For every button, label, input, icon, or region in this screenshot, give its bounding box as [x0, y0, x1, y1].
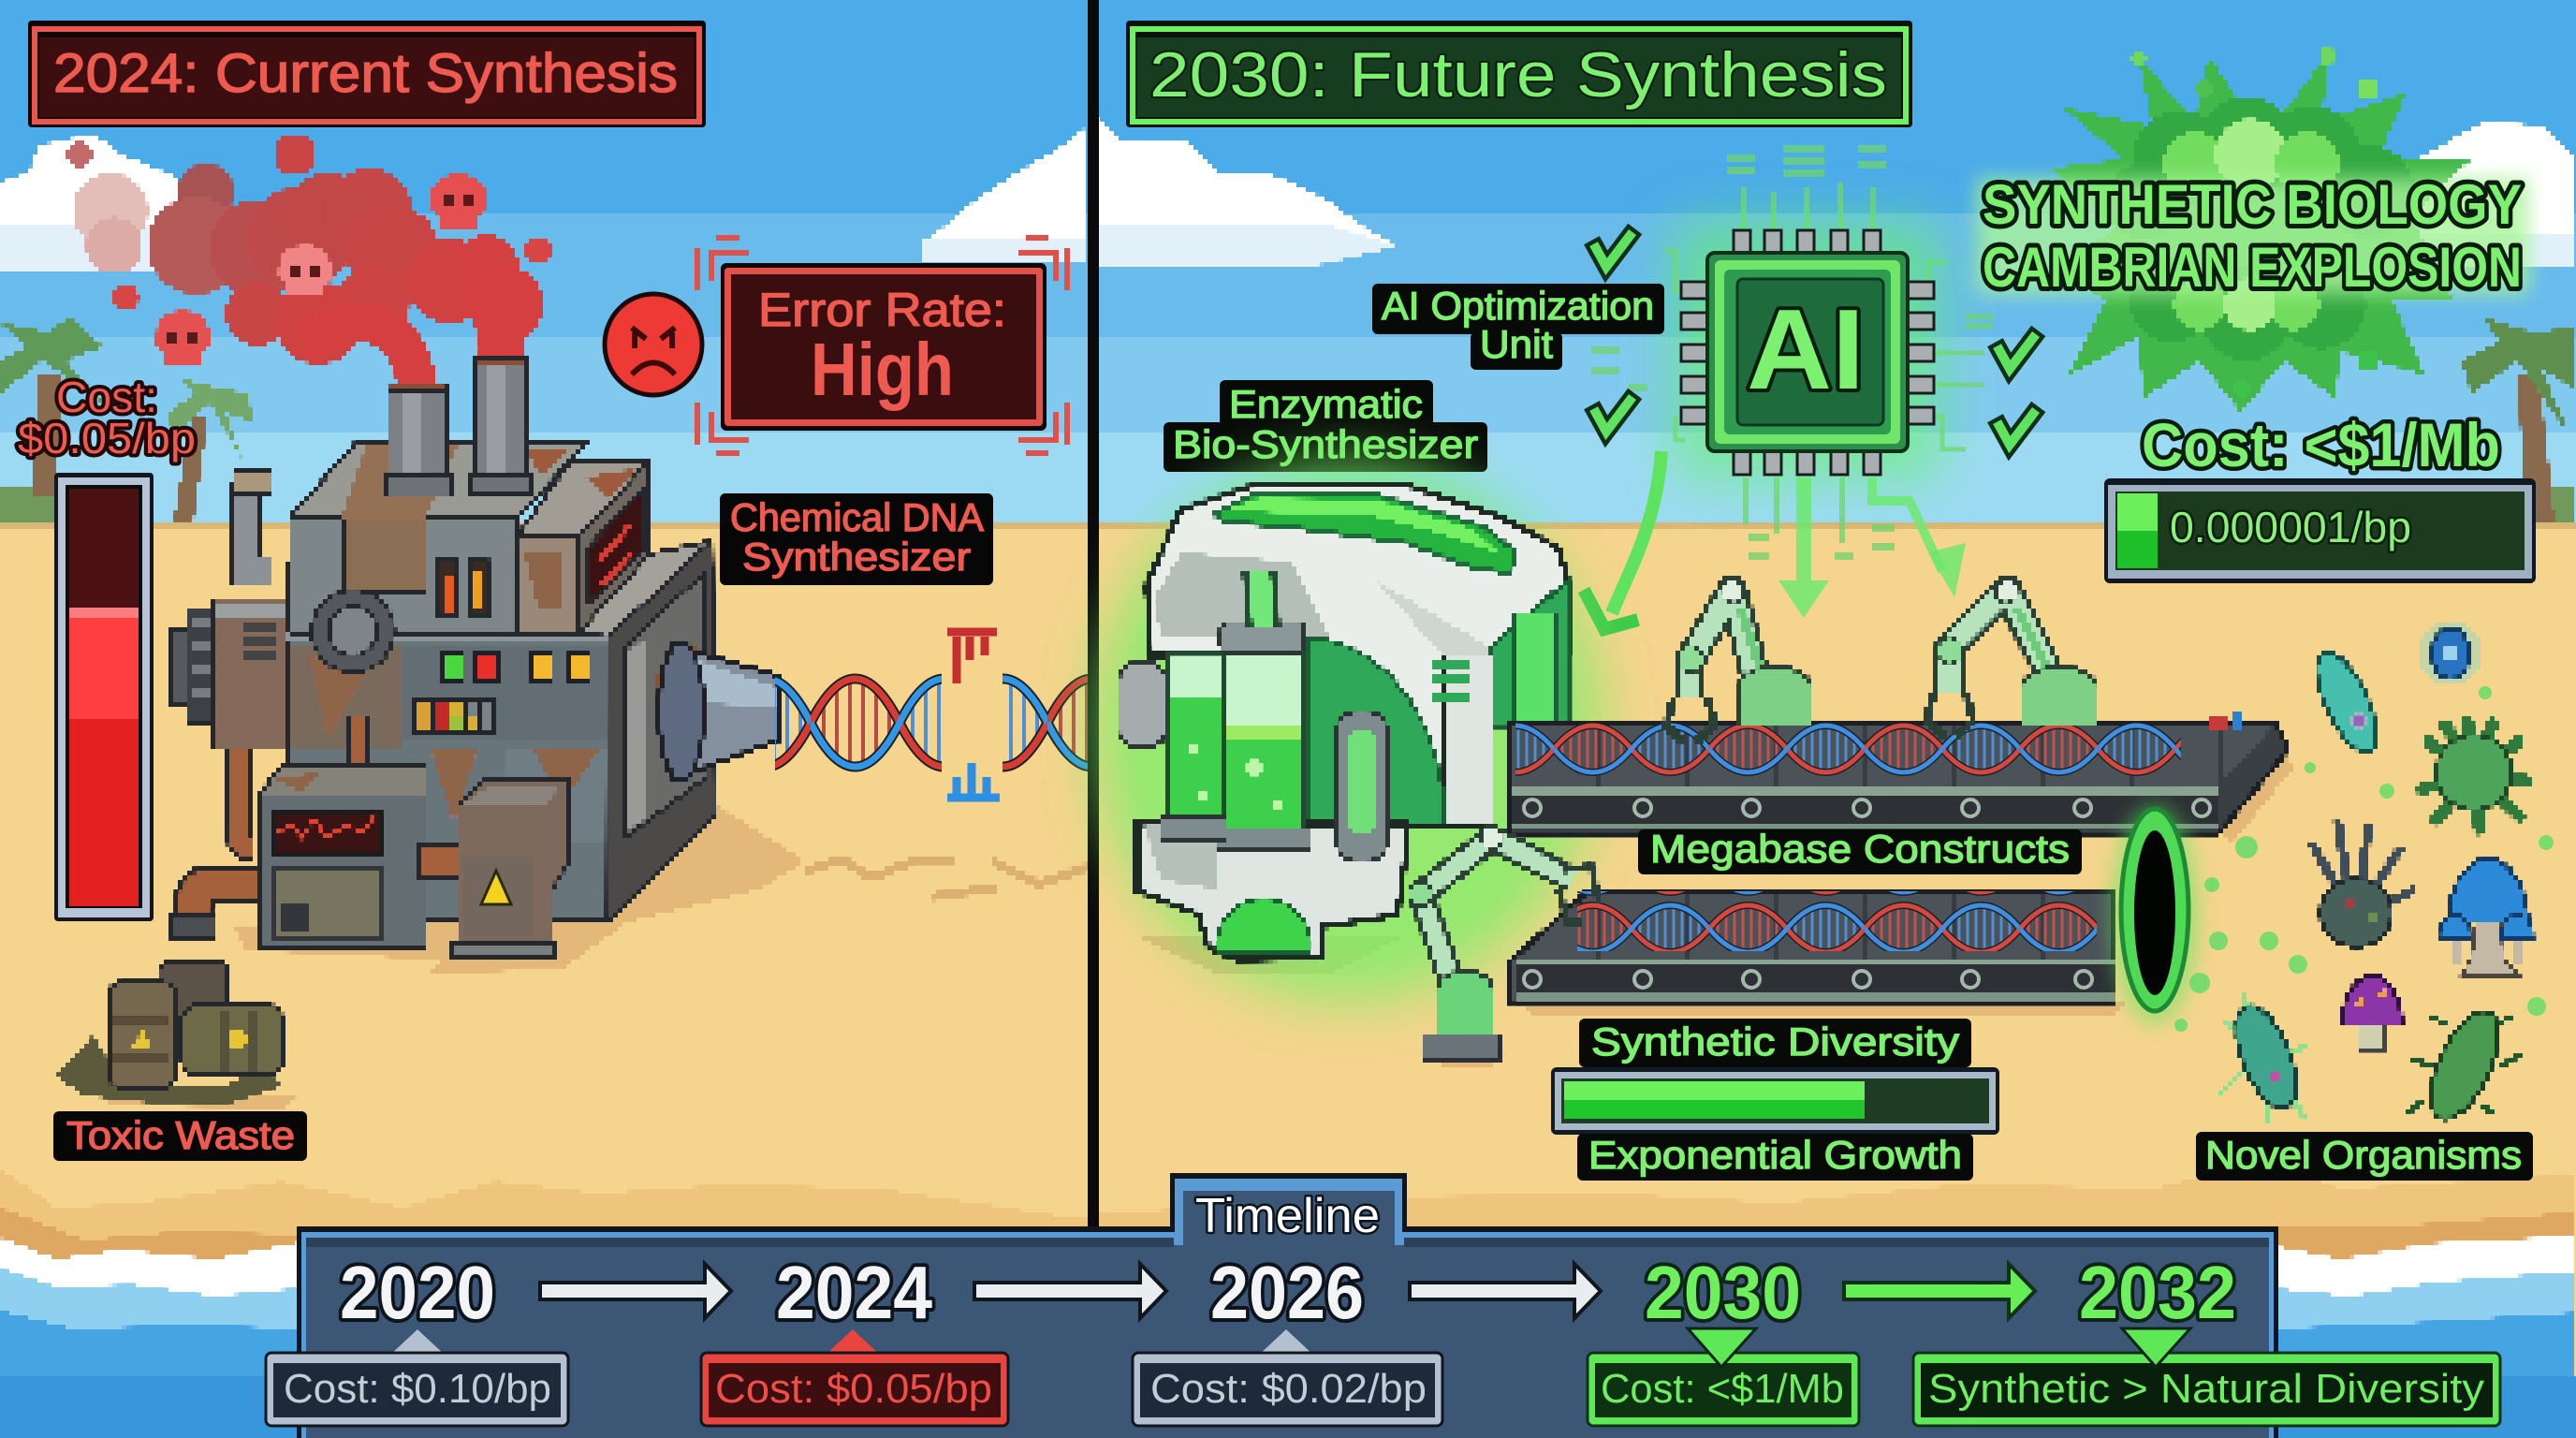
- callout: error rate: [721, 263, 1046, 431]
- foam: [0, 1236, 2576, 1438]
- callout: synthetic biology cambrian explosion: SYNTHETIC BIOLOGY: [1983, 173, 2522, 236]
- title: 2024 current synthesis: 2024: Current Synthesis: [53, 43, 678, 104]
- conveyor belt upper: [1511, 710, 2289, 833]
- label: synthetic diversity: Synthetic Diversity: [1591, 1020, 1959, 1064]
- organism: blue virus: [2419, 622, 2482, 685]
- organism: coral creature: [2312, 819, 2415, 946]
- label: megabase constructs: Megabase Constructs: [1650, 827, 2070, 871]
- panel: left 2024 current synthesis: [18, 21, 1088, 1161]
- cost label: [18, 373, 196, 462]
- cost box 2024: Cost: $0.05/bp: [715, 1366, 992, 1412]
- year 2032: 2032: [2079, 1251, 2236, 1334]
- label: exponential growth: Exponential Growth: [1588, 1133, 1962, 1177]
- right side: [607, 541, 716, 921]
- year 2026: 2026: [1210, 1251, 1364, 1334]
- nozzle: [659, 642, 779, 781]
- dome shell: [1147, 485, 1568, 826]
- icon: skull middle: [279, 245, 331, 294]
- label: toxic waste: Toxic Waste: [66, 1113, 295, 1157]
- label: enzymatic bio-synthesizer: [1164, 380, 1487, 472]
- lever: [348, 716, 371, 777]
- AI optimization arrows and data: [1584, 145, 1994, 629]
- arrow: [540, 1264, 731, 1318]
- year 2030: 2030: [1645, 1251, 1801, 1334]
- label: AI optimization unit: AI Optimization: [1382, 284, 1654, 328]
- water: [0, 1269, 2576, 1438]
- cost bar: future: [2104, 478, 2536, 583]
- tube top pipe: [1221, 623, 1305, 653]
- door: [1492, 580, 1568, 726]
- year 2020: 2020: [340, 1251, 495, 1334]
- explosion burst: [2050, 48, 2471, 412]
- icon: sad face: [605, 294, 702, 395]
- cost box 2032: [1913, 1328, 2500, 1426]
- label: novel organisms: Novel Organisms: [2205, 1133, 2522, 1177]
- cost box 2030: [1588, 1328, 1859, 1426]
- toxic smoke cloud: [66, 134, 551, 389]
- side arch: [1308, 638, 1444, 824]
- DNA strand breaking: [775, 632, 1088, 798]
- belt rollers: [1524, 971, 2092, 988]
- arrow: [974, 1264, 1166, 1318]
- main lower body: [286, 562, 608, 921]
- arrow green: [1844, 1264, 2035, 1318]
- cost label: $0.05/bp: [18, 414, 196, 462]
- timeline frame: [297, 1173, 2278, 1438]
- palm trees: [0, 318, 2576, 528]
- icon: error bracket marks: [697, 238, 1067, 453]
- title: 2024 current synthesis: [28, 21, 706, 127]
- cost label: future: Cost: <$1/Mb: [2142, 410, 2500, 479]
- panel lights: [441, 650, 465, 685]
- cost gauge bar: [54, 473, 154, 921]
- belt rollers: [1524, 800, 2210, 816]
- organism: green bacterium: [2218, 992, 2308, 1123]
- label: enzymatic bio-synthesizer: Bio-Synthesizer: [1173, 422, 1478, 466]
- chip pins: [1681, 230, 1934, 475]
- callout: error rate: High: [811, 328, 954, 411]
- connector pipe: [417, 844, 464, 876]
- title: 2030 future synthesis: 2030: Future Synthesis: [1149, 39, 1887, 110]
- icon: skull top: [431, 174, 487, 227]
- shore bands: [0, 1161, 2576, 1438]
- fragment: blue: [947, 763, 1000, 798]
- panel: right 2030 future synthesis: [1095, 21, 2554, 1181]
- spore dots: [2174, 686, 2554, 1032]
- icon: AI chip: AI: [1747, 286, 1865, 413]
- pipes: [245, 482, 271, 571]
- conveyor belt lower: [1511, 892, 2117, 1002]
- arrow: [1410, 1264, 1601, 1318]
- machine: enzymatic bio-synthesizer: [1095, 459, 1601, 1002]
- cost box 2032: Synthetic > Natural Diversity: [1928, 1366, 2484, 1412]
- cost box 2024: [701, 1329, 1008, 1426]
- icon: skull lower: [156, 311, 210, 363]
- title: 2030 future synthesis: [1126, 21, 1912, 127]
- label: enzymatic bio-synthesizer: Enzymatic: [1229, 382, 1423, 426]
- bubbles: [1247, 760, 1262, 775]
- DNA megabase upper: [1515, 722, 2181, 782]
- cost box 2026: Cost: $0.02/bp: [1150, 1366, 1427, 1412]
- sand: [0, 526, 2576, 1438]
- novel organisms group: [2174, 622, 2554, 1129]
- icon: hazard triangle: [481, 871, 511, 904]
- small tube: [1336, 712, 1388, 861]
- side module: [213, 599, 288, 749]
- icon: AI chip: [1676, 225, 1938, 477]
- hazard box: [459, 779, 569, 946]
- side column: [1444, 655, 1493, 826]
- organism: purple mushroom: [2342, 976, 2402, 1049]
- organism: dark green bacterium: [2406, 1002, 2523, 1129]
- cost box 2020: [266, 1329, 568, 1426]
- sand shadows: [94, 758, 2293, 1109]
- panel: timeline: [266, 1173, 2500, 1438]
- cost box 2026: [1133, 1329, 1442, 1426]
- robot arm three: [1409, 827, 1599, 1059]
- glossy green panel: [1213, 493, 1515, 573]
- year 2024: 2024: [776, 1251, 932, 1334]
- progress bar: synthetic diversity: [1551, 1067, 1999, 1135]
- left gear: [171, 629, 199, 704]
- portal: [2110, 804, 2200, 1025]
- timeline heading: Timeline: [1195, 1189, 1380, 1243]
- DNA megabase lower: [1577, 891, 2097, 951]
- upper body: [290, 518, 517, 633]
- robot arm one: [1666, 580, 1811, 741]
- label: chemical DNA synthesizer: [720, 493, 993, 585]
- callout: error rate: Error Rate:: [758, 284, 1006, 336]
- label: AI optimization unit: Unit: [1480, 322, 1553, 366]
- robot arm two: [1926, 580, 2097, 737]
- wheel: [312, 590, 394, 672]
- cost box 2020: Cost: $0.10/bp: [284, 1366, 551, 1412]
- main tube: [1222, 646, 1305, 843]
- center divider: [1088, 0, 1099, 1228]
- sky bands: [0, 0, 2576, 215]
- lower left box: [258, 796, 426, 948]
- left tube: [1166, 655, 1224, 824]
- organism: green spiky: [2417, 716, 2531, 835]
- label: chemical DNA synthesizer: Chemical DNA: [730, 495, 984, 539]
- organism: blue mushrooms: [2439, 858, 2533, 976]
- cost box 2030: Cost: <$1/Mb: [1601, 1366, 1844, 1412]
- stair tier: [578, 541, 711, 637]
- dome grey band: [1153, 552, 1329, 637]
- clouds: [0, 117, 2576, 271]
- label: AI optimization unit: [1372, 284, 1664, 370]
- grey side cap: [1119, 663, 1166, 747]
- chimneys: [388, 384, 447, 487]
- icon: toxic barrels: [56, 961, 283, 1105]
- cost label: Cost:: [56, 373, 157, 421]
- side display: [588, 489, 642, 604]
- organism: teal bacillus: [2305, 644, 2388, 760]
- base: [1137, 824, 1407, 960]
- icon: checkmarks: [1596, 236, 2033, 445]
- fragment: red: [947, 632, 997, 683]
- cost bar: future: 0.000001/bp: [2170, 503, 2411, 551]
- label: chemical DNA synthesizer: Synthesizer: [742, 535, 971, 579]
- gauges: [438, 560, 457, 616]
- callout: synthetic biology cambrian explosion: [1977, 173, 2529, 299]
- machine: chemical DNA synthesizer: [171, 358, 716, 959]
